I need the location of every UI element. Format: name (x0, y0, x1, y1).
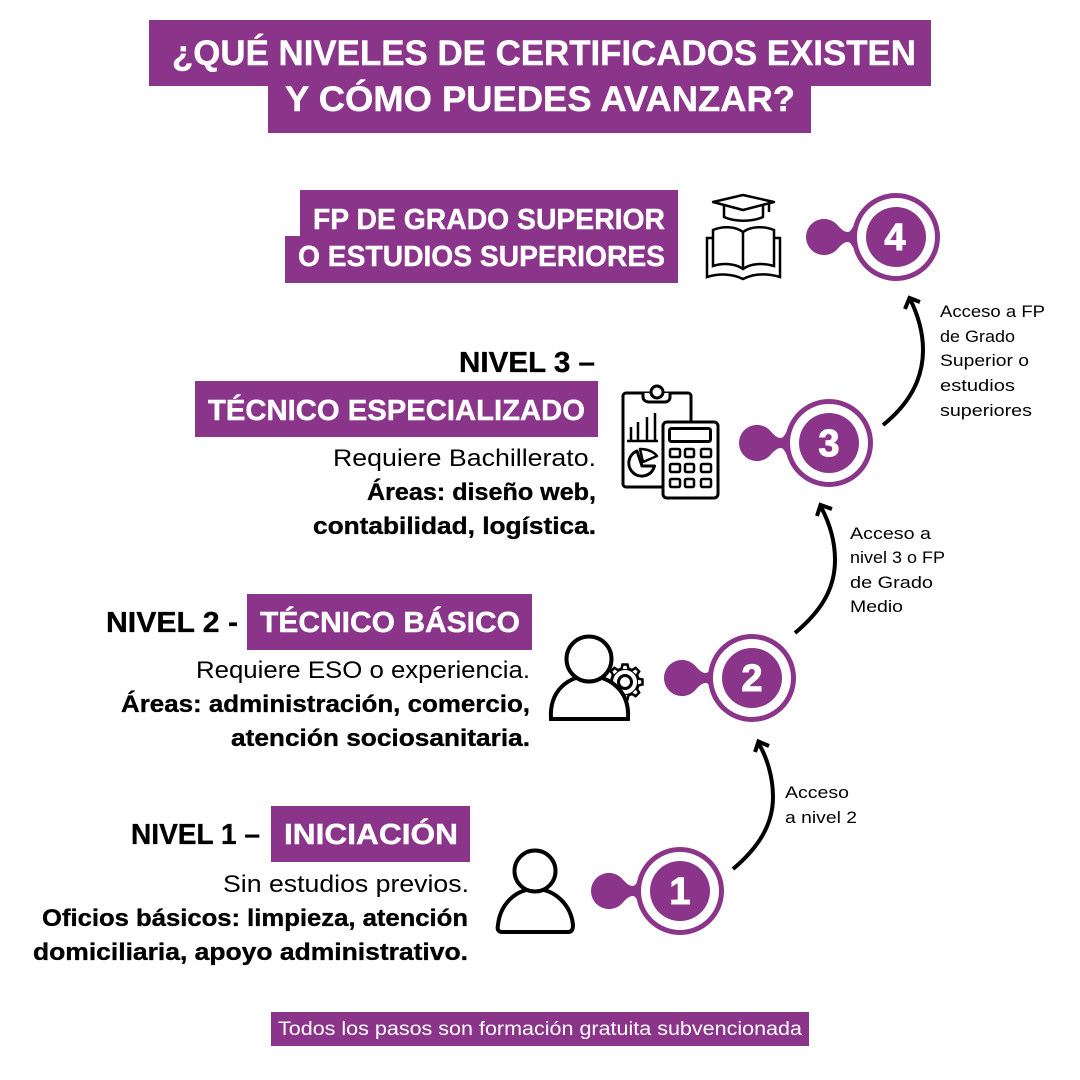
step marker 4: 4 (884, 217, 906, 259)
heading: FP de grado superior (285, 190, 678, 283)
badge: técnico especializado (195, 381, 598, 437)
heading: FP de grado superior: FP DE GRADO SUPERIOR (313, 204, 665, 236)
label: access to level 2: Acceso (785, 783, 849, 802)
description: level 3: contabilidad, logística. (313, 513, 596, 540)
heading: FP de grado superior: O ESTUDIOS SUPERIORES (298, 241, 665, 273)
heading: nivel 2: NIVEL 2 - (106, 607, 238, 639)
heading: nivel 3: NIVEL 3 – (459, 347, 595, 379)
description: level 1: Sin estudios previos. (223, 871, 469, 898)
badge: iniciación: INICIACIÓN (284, 817, 458, 851)
step marker 1 (591, 850, 722, 932)
label: access to higher FP: Superior o (940, 351, 1029, 370)
step marker 3 (739, 402, 870, 484)
label: access to higher FP: superiores (940, 401, 1032, 420)
heading: nivel 1: NIVEL 1 – (131, 819, 260, 851)
level 3 block (195, 347, 598, 540)
step marker 4 (806, 196, 938, 278)
title: ¿QUÉ NIVELES DE CERTIFICADOS EXISTEN (172, 33, 916, 73)
arrow: 2 to 3 (795, 505, 835, 633)
description: level 1 (33, 871, 469, 966)
label: access to level 2: a nivel 2 (785, 808, 857, 827)
label: access to higher FP: Acceso a FP (940, 302, 1045, 321)
description: level 2: atención sociosanitaria. (231, 725, 530, 752)
description: level 3: Requiere Bachillerato. (333, 445, 596, 472)
description: level 3: Áreas: diseño web, (367, 478, 596, 506)
description: level 2: Áreas: administración, comercio, (121, 690, 530, 718)
label: access to higher FP (940, 302, 1045, 420)
level 1 block (33, 806, 470, 966)
label: access to level 2 (785, 783, 857, 827)
label: access to level 3: Medio (850, 597, 903, 616)
label: access to level 3: nivel 3 o FP (850, 548, 945, 567)
title: Y CÓMO PUEDES AVANZAR? (285, 79, 795, 119)
label: access to level 3: Acceso a (850, 524, 932, 543)
description: level 1: Oficios básicos: limpieza, atención (42, 905, 468, 932)
level 2 block (106, 594, 532, 752)
step marker 2 (664, 636, 794, 720)
step marker 1: 1 (669, 871, 691, 913)
description: level 1: domiciliaria, apoyo administrativo. (33, 939, 468, 966)
footer note: Todos los pasos son formación gratuita subvencionada (278, 1019, 802, 1040)
icon: person with gear (551, 636, 642, 719)
label: access to level 3: de Grado (850, 573, 933, 592)
badge: iniciación (271, 806, 470, 862)
step marker 2: 2 (741, 658, 763, 700)
badge: técnico básico: TÉCNICO BÁSICO (260, 605, 520, 639)
badge: técnico especializado: TÉCNICO ESPECIALIZADO (208, 393, 585, 427)
description: level 2: Requiere ESO o experiencia. (196, 657, 530, 684)
label: access to level 3 (850, 524, 945, 616)
description: level 2 (121, 657, 530, 752)
arrow: 1 to 2 (733, 742, 773, 869)
label: access to higher FP: estudios (940, 376, 1015, 395)
step marker 3: 3 (818, 423, 840, 465)
arrow: 3 to 4 (883, 298, 923, 425)
badge: técnico básico (247, 594, 532, 650)
footer note (271, 1012, 809, 1046)
icon: graduation cap and book (707, 195, 780, 279)
label: access to higher FP: de Grado (940, 327, 1015, 346)
title (149, 20, 931, 133)
description: level 3 (313, 445, 596, 540)
icon: clipboard and calculator (623, 386, 718, 498)
icon: person (498, 850, 573, 932)
